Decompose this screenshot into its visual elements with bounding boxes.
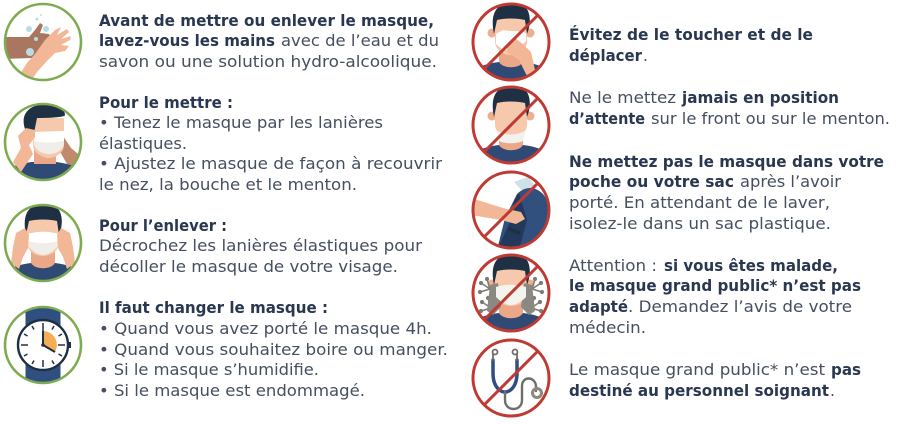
text: wash hands: Avant de mettre ou enlever le masque, xyxy=(99,12,434,30)
text: removing mask: décoller le masque de votre visage. xyxy=(99,258,398,276)
text: putting mask on: Pour le mettre : xyxy=(99,94,233,112)
text: when to change mask xyxy=(99,299,448,400)
text: putting mask on: le nez, la bouche et le menton. xyxy=(99,176,357,194)
text: waiting position: d’attente xyxy=(569,110,645,128)
text: not for healthcare staff: Le masque grand public* n’est xyxy=(569,361,825,379)
text: not in pocket: poche ou votre sac xyxy=(569,173,734,191)
text: do not touch: déplacer xyxy=(569,47,642,65)
text: when to change mask: • Si le masque est endommagé. xyxy=(99,382,365,400)
text: not for healthcare staff: . xyxy=(830,382,835,400)
text: wash hands xyxy=(99,12,439,71)
text: putting mask on: élastiques. xyxy=(99,135,187,153)
text: putting mask on: • Ajustez le masque de façon à recouvrir xyxy=(99,155,443,173)
text: not in pocket: isolez-le dans un sac plastique. xyxy=(569,215,831,233)
icon: do not touch mask xyxy=(471,3,551,84)
text: putting mask on xyxy=(99,94,443,194)
text: waiting position xyxy=(569,89,890,128)
text: wash hands: lavez-vous les mains xyxy=(99,32,275,50)
text: waiting position: Ne le mettez xyxy=(569,89,676,107)
text: not in pocket: Ne mettez pas le masque dans votre xyxy=(569,153,884,171)
text: if sick: . Demandez l’avis de votre xyxy=(628,298,852,316)
text: not for healthcare staff: destiné au personnel soignant xyxy=(569,382,830,400)
text: do not touch: . xyxy=(643,47,648,65)
text: if sick: le masque grand public* n’est pas xyxy=(569,277,861,295)
icon: putting mask on xyxy=(4,104,84,184)
icon: mask not on chin xyxy=(471,86,551,167)
text: removing mask xyxy=(99,217,423,276)
text: not for healthcare staff xyxy=(569,361,861,400)
text: removing mask: Décrochez les lanières élastiques pour xyxy=(99,237,423,255)
text: when to change mask: • Quand vous souhaitez boire ou manger. xyxy=(99,341,448,359)
text: not in pocket: après l’avoir xyxy=(740,173,842,191)
text: removing mask: Pour l’enlever : xyxy=(99,217,227,235)
icon: washing hands xyxy=(3,4,81,84)
text: when to change mask: Il faut changer le masque : xyxy=(99,299,328,317)
text: when to change mask: • Quand vous avez porté le masque 4h. xyxy=(99,320,432,338)
text: waiting position: sur le front ou sur le menton. xyxy=(651,110,890,128)
text: when to change mask: • Si le masque s’humidifie. xyxy=(99,361,319,379)
icon: sick person xyxy=(471,254,551,335)
text: waiting position: jamais en position xyxy=(681,89,839,107)
icon: removing mask xyxy=(3,204,83,285)
text: if sick: Attention : xyxy=(569,257,657,275)
icon: mask in pocket xyxy=(471,172,551,250)
text: wash hands: avec de l’eau et du xyxy=(281,32,439,50)
text: putting mask on: • Tenez le masque par les lanières xyxy=(99,114,383,132)
text: wash hands: savon ou une solution hydro-alcoolique. xyxy=(99,53,437,71)
text: not in pocket: porté. En attendant de le laver, xyxy=(569,194,830,212)
icon: stethoscope xyxy=(473,340,549,416)
icon: watch xyxy=(5,305,81,385)
text: if sick: adapté xyxy=(569,298,628,316)
text: not for healthcare staff: pas xyxy=(831,361,861,379)
text: do not touch: Évitez de le toucher et de le xyxy=(569,25,813,44)
text: if sick xyxy=(569,257,861,337)
text: if sick: si vous êtes malade, xyxy=(664,257,838,275)
text: do not touch xyxy=(569,25,813,65)
text: not in pocket xyxy=(569,153,884,233)
text: if sick: médecin. xyxy=(569,319,646,337)
